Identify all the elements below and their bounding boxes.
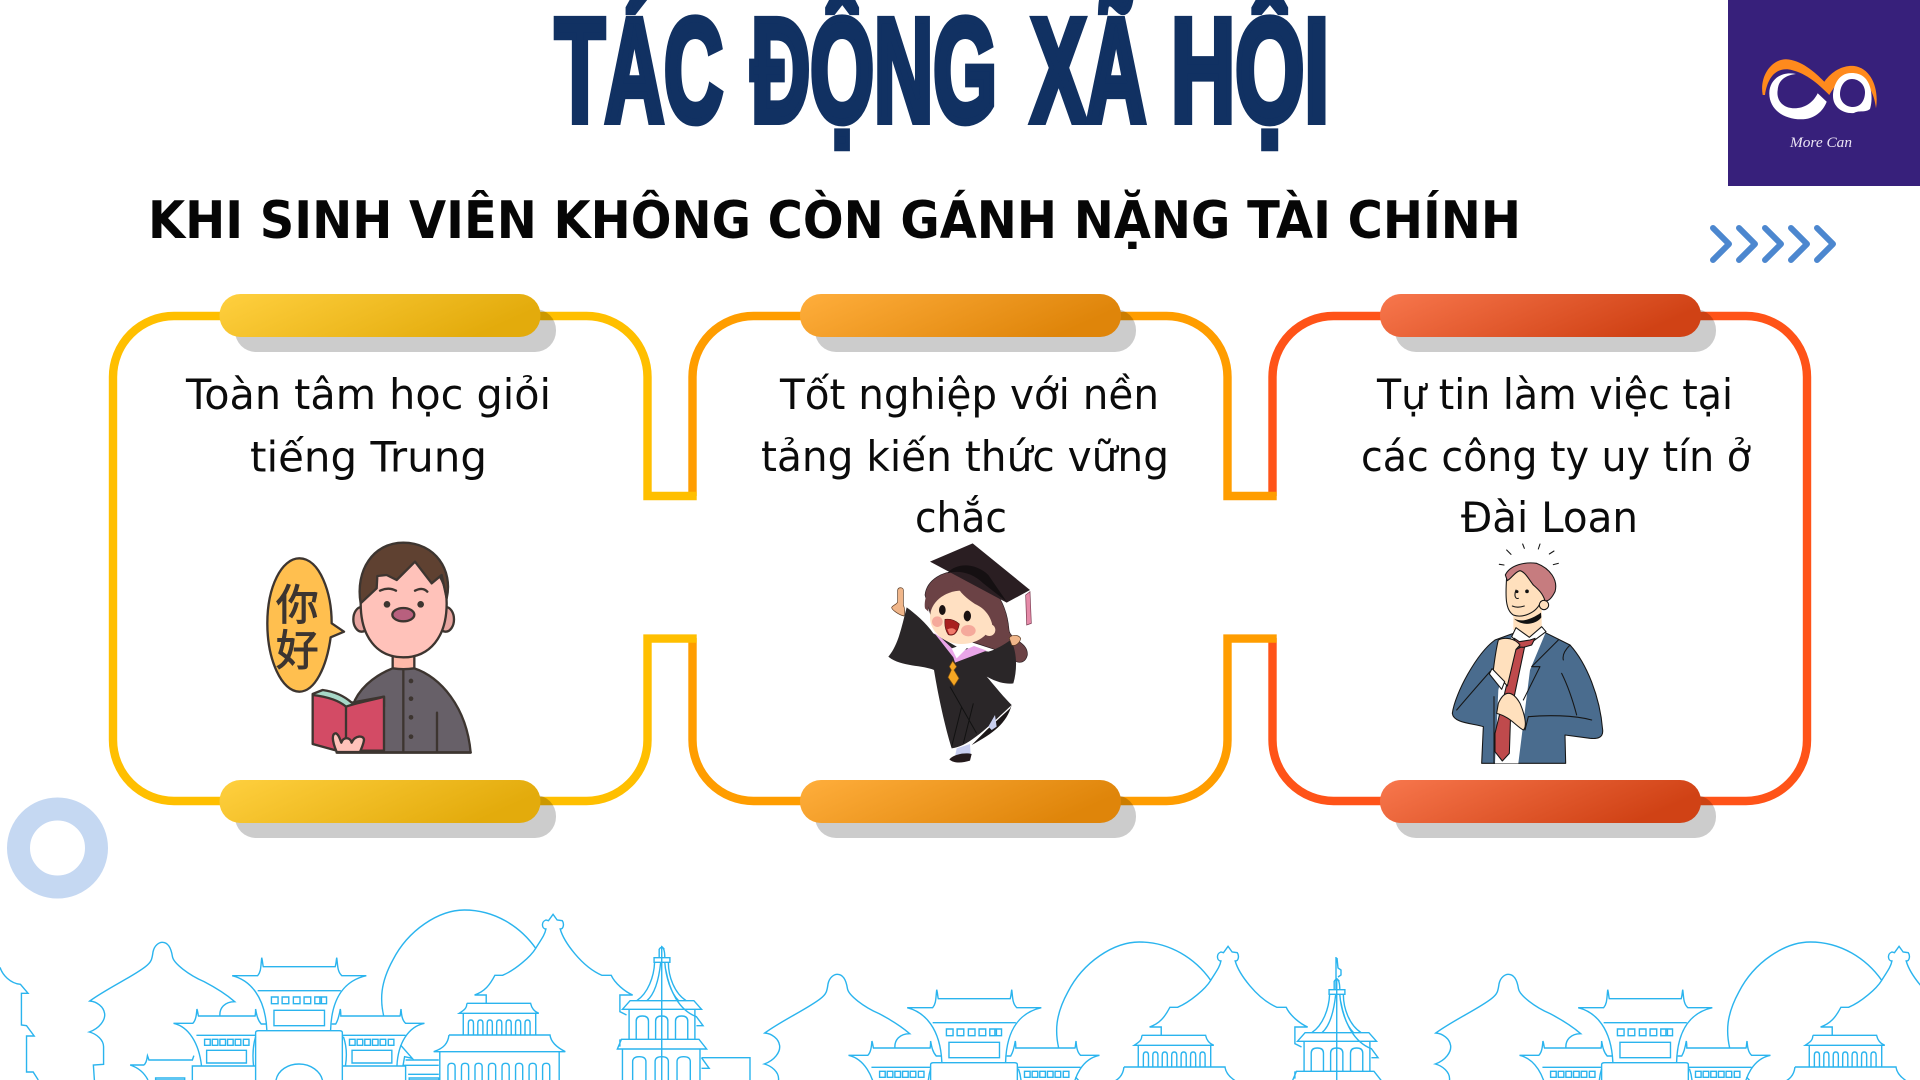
icon: student reading with speech bubble: 好 bbox=[276, 627, 319, 675]
panel: graduate: Tốt nghiệp với nền bbox=[779, 370, 1159, 419]
panel: career: Đài Loan bbox=[1461, 493, 1638, 542]
panel: graduate bbox=[692, 294, 1277, 838]
icon: student reading with speech bubble bbox=[267, 543, 471, 753]
panel: career: Tự tin làm việc tại bbox=[1376, 370, 1733, 419]
skyline: right section bbox=[1435, 942, 1920, 1080]
panel: studying Chinese bbox=[113, 294, 697, 838]
icon: student reading with speech bubble: 你 bbox=[276, 582, 319, 630]
icon: businessman adjusting tie bbox=[1452, 544, 1603, 763]
panel: career bbox=[1272, 294, 1807, 838]
subtitle: KHI SINH VIÊN KHÔNG CÒN GÁNH NẶNG TÀI CHÍNH bbox=[148, 189, 1521, 251]
skyline partial building at left edge bbox=[0, 967, 38, 1080]
logo: More Can bbox=[1728, 0, 1920, 186]
skyline: middle tower flag spire bbox=[1336, 957, 1341, 990]
title bbox=[555, 0, 1329, 153]
skyline: left section bbox=[89, 910, 750, 1080]
decorative ring bbox=[18, 809, 96, 887]
logo: More Can: More Can bbox=[1789, 135, 1852, 151]
panel: studying Chinese: tiếng Trung bbox=[250, 432, 487, 482]
skyline: middle section bbox=[764, 942, 1425, 1080]
icon: graduate girl bbox=[888, 543, 1031, 763]
panel: graduate: tảng kiến thức vững bbox=[761, 432, 1169, 481]
panel: studying Chinese: Toàn tâm học giỏi bbox=[185, 370, 551, 419]
panel: graduate: chắc bbox=[915, 493, 1007, 542]
panel: career: các công ty uy tín ở bbox=[1361, 432, 1752, 481]
icon: five chevron arrows bbox=[1713, 228, 1833, 260]
